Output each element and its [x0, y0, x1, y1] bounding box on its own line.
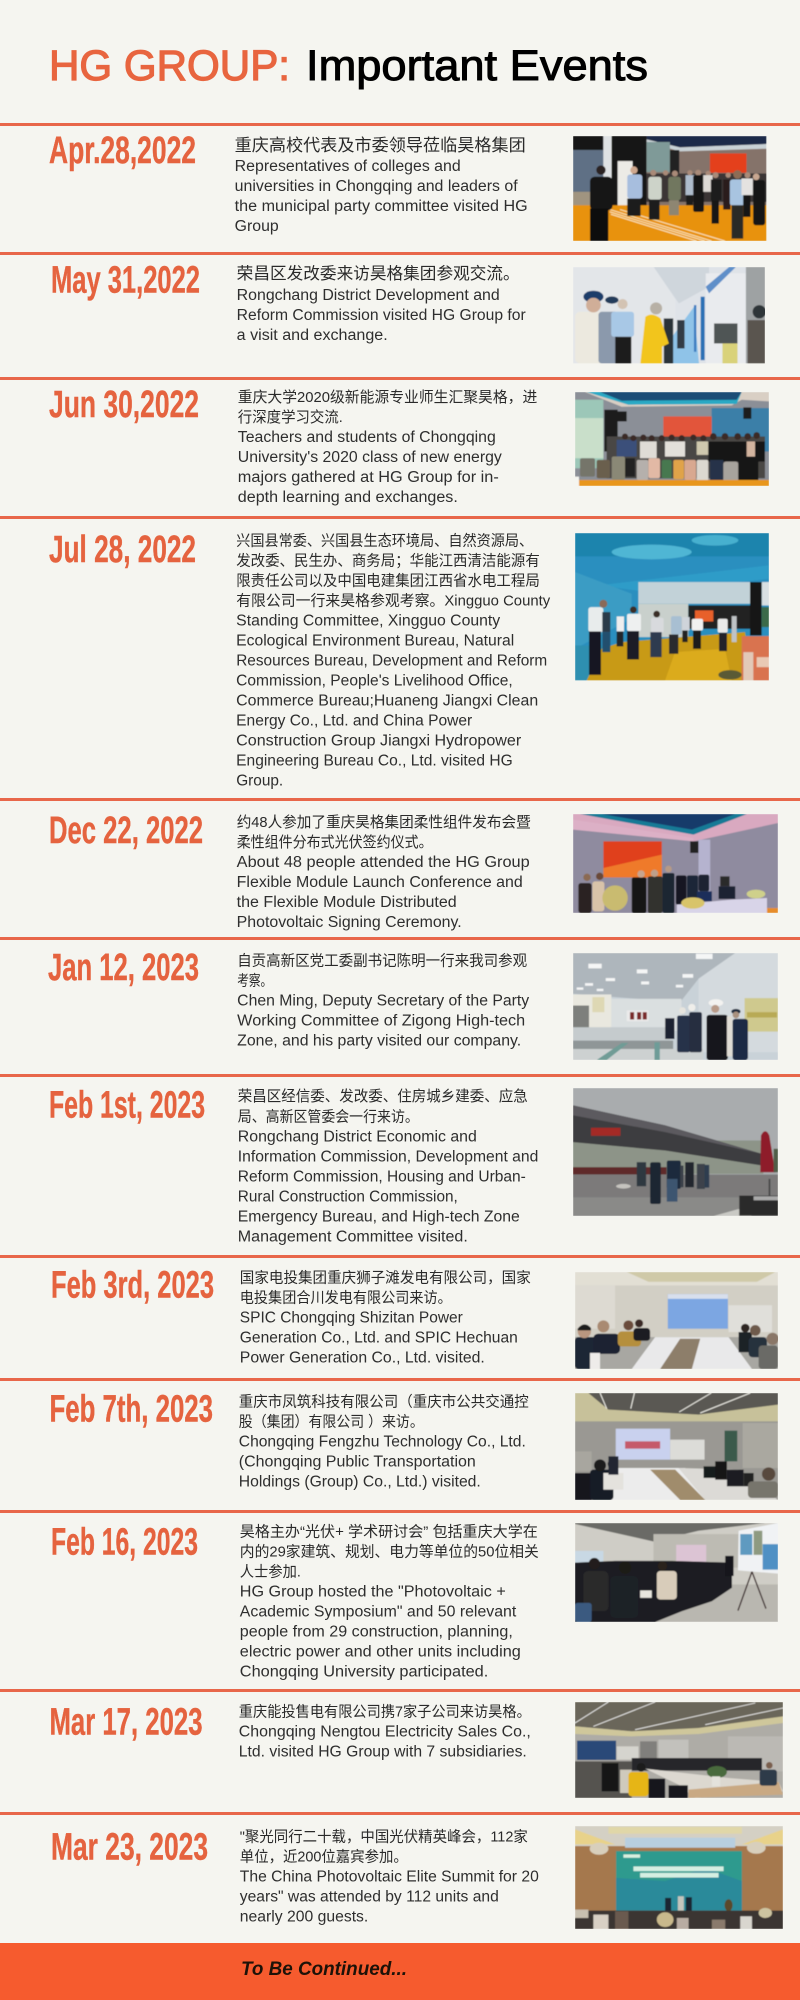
- description: The China Photovoltaic Elite Summit for 20: [240, 1869, 539, 1886]
- description: 有限公司一行来昊格参观考察。Xingguo County: [236, 591, 551, 609]
- description: Holdings (Group) Co., Ltd.) visited.: [239, 1474, 481, 1491]
- description: Information Commission, Development and: [238, 1149, 538, 1166]
- description: [237, 264, 526, 344]
- footer banner: [0, 1943, 800, 2000]
- date: Feb 1st, 2023: [49, 1084, 205, 1126]
- description: 重庆市凤筑科技有限公司（重庆市公共交通控: [239, 1393, 529, 1411]
- description: Chongqing Nengtou Electricity Sales Co.,: [239, 1724, 531, 1741]
- description: a visit and exchange.: [237, 327, 388, 344]
- description: Construction Group Jiangxi Hydropower: [236, 732, 521, 749]
- description: (Chongqing Public Transportation: [239, 1454, 476, 1471]
- photo: visitors with yellow coat in clean corridor: [573, 267, 765, 364]
- description: [236, 531, 551, 789]
- description: [239, 1393, 529, 1491]
- description: 行深度学习交流.: [238, 408, 343, 426]
- description: [238, 1087, 538, 1245]
- description: 电投集团合川发电有限公司来访。: [240, 1289, 452, 1306]
- description: [240, 1269, 531, 1366]
- event row: Jan 12 2023: [48, 947, 778, 1060]
- event row: Jun 30 2022: [49, 384, 769, 506]
- photo: long conference table meeting: [575, 1702, 783, 1798]
- description: people from 29 construction, planning,: [240, 1624, 513, 1641]
- description: 发改委、民生办、商务局；华能江西清洁能源有: [236, 552, 540, 569]
- description: Resources Bureau, Development and Reform: [236, 652, 547, 669]
- description: Photovoltaic Signing Ceremony.: [237, 914, 462, 931]
- date: Feb 16, 2023: [51, 1521, 198, 1563]
- photo: seated symposium audience: [575, 1523, 778, 1622]
- description: 局、高新区管委会一行来访。: [238, 1109, 419, 1126]
- description: Flexible Module Launch Conference and: [237, 874, 523, 891]
- date: Feb 3rd, 2023: [51, 1264, 214, 1306]
- description: Emergency Bureau, and High-tech Zone: [238, 1208, 520, 1225]
- description: Group: [235, 218, 279, 235]
- description: Generation Co., Ltd. and SPIC Hechuan: [240, 1329, 518, 1346]
- description: [235, 136, 528, 235]
- date: Mar 23, 2023: [51, 1826, 208, 1868]
- description: [240, 1524, 539, 1681]
- date: Jul 28, 2022: [49, 529, 196, 571]
- description: 限责任公司以及中国电建集团江西省水电工程局: [236, 572, 540, 589]
- date: Apr.28,2022: [49, 130, 196, 172]
- date: Mar 17, 2023: [50, 1701, 202, 1743]
- description: HG Group hosted the "Photovoltaic +: [240, 1584, 506, 1601]
- photo: visitors in orange-floored hall: [573, 136, 766, 241]
- description: 柔性组件分布式光伏签约仪式。: [237, 834, 433, 851]
- photo: meeting room with world map slide: [575, 1272, 778, 1369]
- event row: Jul 28 2022: [49, 529, 769, 789]
- event row: Feb 16 2023: [51, 1521, 778, 1681]
- date: Jun 30,2022: [49, 384, 199, 426]
- description: majors gathered at HG Group for in-: [238, 469, 499, 486]
- date: Dec 22, 2022: [49, 810, 203, 852]
- description: 兴国县常委、兴国县生态环境局、自然资源局、: [236, 531, 533, 549]
- description: 荣昌区经信委、发改委、住房城乡建委、应急: [238, 1087, 528, 1105]
- description: 人士参加.: [240, 1564, 301, 1581]
- description: 约48人参加了重庆昊格集团柔性组件发布会暨: [237, 814, 531, 831]
- description: About 48 people attended the HG Group: [237, 854, 530, 871]
- description: Ecological Environment Bureau, Natural: [236, 632, 514, 649]
- description: "聚光同行二十载，中国光伏精英峰会，112家: [240, 1828, 528, 1846]
- date: Jan 12, 2023: [48, 947, 199, 989]
- description: [238, 389, 537, 506]
- description: 考察。: [237, 971, 272, 989]
- photo: factory clean room tour: [573, 953, 778, 1060]
- description: SPIC Chongqing Shizitan Power: [240, 1309, 463, 1326]
- footer text: To Be Continued...: [241, 1959, 407, 1980]
- photo: meeting room with presentation: [575, 1393, 778, 1500]
- event row: Feb 7th 2023: [50, 1388, 778, 1500]
- description: 股（集团）有限公司 ）来访。: [239, 1414, 424, 1431]
- description: universities in Chongqing and leaders of: [235, 178, 518, 195]
- description: Rongchang District Development and: [237, 287, 500, 304]
- description: Chen Ming, Deputy Secretary of the Party: [237, 992, 529, 1009]
- description: Group.: [236, 772, 283, 789]
- description: 重庆高校代表及市委领导莅临昊格集团: [235, 136, 526, 155]
- description: Power Generation Co., Ltd. visited.: [240, 1349, 485, 1366]
- photo: visitors under blue lit ceiling: [575, 533, 769, 680]
- description: [239, 1704, 531, 1761]
- description: the Flexible Module Distributed: [237, 894, 457, 911]
- description: 重庆能投售电有限公司携7家子公司来访昊格。: [239, 1704, 531, 1721]
- description: depth learning and exchanges.: [238, 489, 458, 506]
- description: the municipal party committee visited HG: [235, 198, 528, 215]
- description: 昊格主办“光伏+ 学术研讨会” 包括重庆大学在: [240, 1524, 538, 1541]
- description: Commerce Bureau;Huaneng Jiangxi Clean: [236, 692, 538, 709]
- description: Chongqing University participated.: [240, 1664, 488, 1681]
- description: [237, 814, 531, 931]
- description: 荣昌区发改委来访昊格集团参观交流。: [237, 264, 520, 283]
- description: Standing Committee, Xingguo County: [236, 612, 500, 629]
- description: Engineering Bureau Co., Ltd. visited HG: [236, 752, 513, 769]
- description: 内的29家建筑、规划、电力等单位的50位相关: [240, 1543, 539, 1561]
- description: 重庆大学2020级新能源专业师生汇聚昊格，进: [238, 389, 537, 406]
- event row: Mar 17 2023: [50, 1701, 783, 1798]
- date: Feb 7th, 2023: [50, 1388, 213, 1430]
- title: [49, 42, 648, 90]
- description: nearly 200 guests.: [240, 1909, 368, 1926]
- photo: student group portrait: [575, 392, 769, 486]
- description: Commission, People's Livelihood Office,: [236, 672, 513, 689]
- event row: May 31 2022: [51, 260, 766, 364]
- title: HG GROUP:: [49, 42, 290, 90]
- description: Zone, and his party visited our company.: [237, 1032, 521, 1049]
- photo: signing ceremony with red screen: [573, 814, 778, 913]
- description: Representatives of colleges and: [235, 158, 461, 175]
- photo: outdoor solar carport visit: [573, 1088, 778, 1216]
- event row: Apr 28 2022: [49, 130, 766, 241]
- event row: Dec 22 2022: [49, 810, 778, 931]
- description: Teachers and students of Chongqing: [238, 429, 496, 446]
- description: Ltd. visited HG Group with 7 subsidiaries.: [239, 1744, 527, 1761]
- description: electric power and other units including: [240, 1644, 521, 1661]
- description: [237, 951, 529, 1049]
- description: University's 2020 class of new energy: [238, 449, 502, 466]
- description: Academic Symposium" and 50 relevant: [240, 1604, 517, 1621]
- event row: Feb 3rd 2023: [51, 1264, 779, 1369]
- date: May 31,2022: [51, 260, 200, 302]
- description: Reform Commission, Housing and Urban-: [238, 1169, 526, 1186]
- description: years" was attended by 112 units and: [240, 1889, 499, 1906]
- description: Energy Co., Ltd. and China Power: [236, 712, 472, 729]
- photo: summit stage with green LED screen: [575, 1826, 783, 1929]
- event row: Mar 23 2023: [51, 1826, 783, 1929]
- description: Rural Construction Commission,: [238, 1188, 458, 1205]
- description: 单位，近200位嘉宾参加。: [240, 1849, 408, 1866]
- description: Reform Commission visited HG Group for: [237, 307, 526, 324]
- description: [240, 1828, 539, 1926]
- description: Management Committee visited.: [238, 1228, 468, 1245]
- event row: Feb 1st 2023: [49, 1084, 778, 1245]
- description: Chongqing Fengzhu Technology Co., Ltd.: [239, 1434, 526, 1451]
- description: Working Committee of Zigong High-tech: [237, 1012, 525, 1029]
- description: 国家电投集团重庆狮子滩发电有限公司，国家: [240, 1269, 531, 1286]
- description: Rongchang District Economic and: [238, 1129, 477, 1146]
- title: Important Events: [306, 42, 648, 90]
- description: 自贡高新区党工委副书记陈明一行来我司参观: [237, 951, 527, 969]
